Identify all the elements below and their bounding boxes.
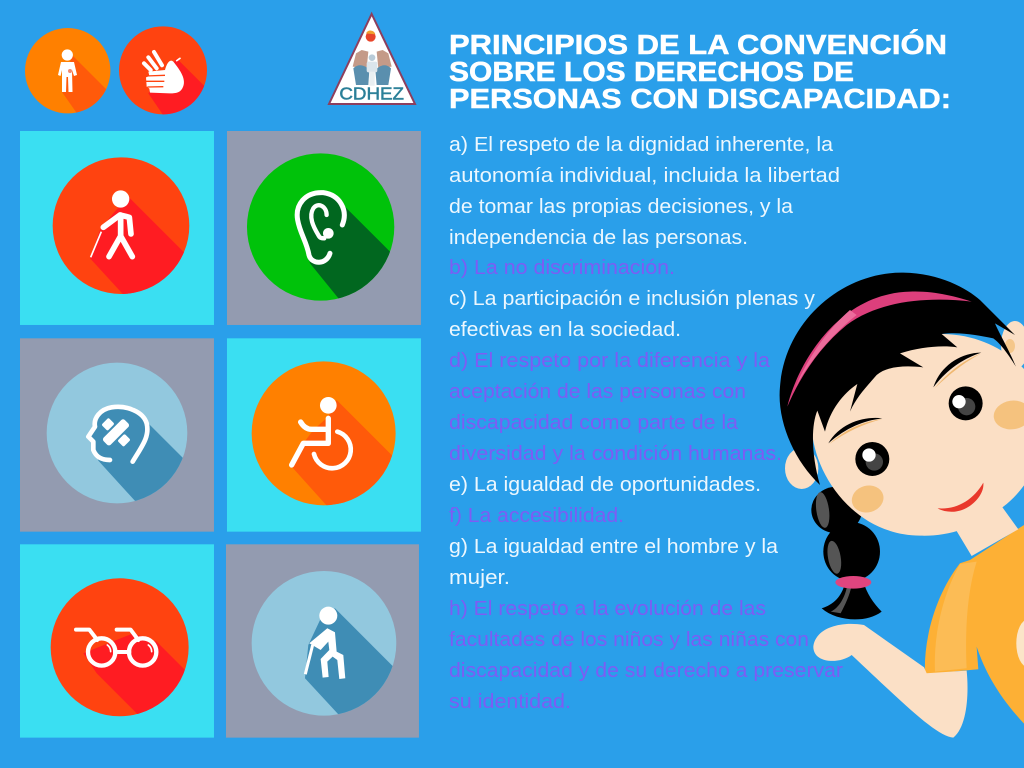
- title: PERSONAS CON DISCAPACIDAD:: [449, 83, 951, 114]
- hair: [780, 273, 1016, 485]
- right cheek: [992, 398, 1024, 432]
- right eye: [949, 386, 983, 420]
- logo emblem: [353, 31, 392, 86]
- text block: principles list: facultades de los niños y las niñas con: [449, 628, 809, 651]
- logo text: CDHEZ: [339, 84, 404, 104]
- right eyebrow: [933, 353, 981, 389]
- text block: principles list: discapacidad como parte de la: [449, 411, 739, 434]
- text block: principles list: discapacidad y de su derecho a preservar: [449, 659, 843, 682]
- text block: principles list: aceptación de las personas con: [449, 380, 746, 403]
- left ear: [785, 448, 818, 489]
- left eye: [855, 442, 889, 476]
- text block: principles list: autonomía individual, incluida la libertad: [449, 164, 840, 187]
- shirt: [925, 525, 1024, 733]
- panel: hearing: [227, 131, 421, 325]
- title: SOBRE LOS DERECHOS DE: [449, 56, 854, 87]
- text block: principles list: su identidad.: [449, 690, 571, 713]
- mouth: [938, 483, 983, 512]
- text block: principles list: h) El respeto a la evolución de las: [449, 597, 766, 620]
- left eyebrow: [828, 418, 882, 444]
- braid: [811, 487, 882, 619]
- title: [449, 29, 951, 114]
- left cheek: [849, 482, 887, 516]
- icon: head with bandage: [88, 407, 147, 462]
- text block: principles list: diversidad y la condición humanas.: [449, 442, 782, 465]
- icon: wheelchair user: [292, 397, 351, 468]
- icon: ear: [297, 193, 344, 262]
- panel: elderly person: [226, 544, 419, 738]
- text block: principles list: de tomar las propias decisiones, y la: [449, 195, 794, 218]
- text block: principles list: b) La no discriminación.: [449, 256, 675, 279]
- face: [812, 334, 1024, 536]
- text block: principles list: g) La igualdad entre el hombre y la: [449, 535, 779, 558]
- icon: glasses: [76, 630, 156, 666]
- headband: [787, 292, 972, 407]
- icon: person with cane: [91, 190, 132, 257]
- text block: principles list: c) La participación e inclusión plenas y: [449, 287, 816, 310]
- panel: wheelchair: [227, 338, 421, 532]
- text block: principles list: e) La igualdad de oportunidades.: [449, 473, 761, 496]
- panel: cognitive disability: [20, 338, 217, 532]
- text block: principles list: efectivas en la sociedad.: [449, 318, 681, 341]
- text block: principles list: d) El respeto por la diferencia y la: [449, 349, 771, 372]
- text block: principles list: independencia de las personas.: [449, 226, 748, 249]
- text block: principles list: a) El respeto de la dignidad inherente, la: [449, 133, 834, 156]
- illustration: girl: [780, 273, 1024, 738]
- right ear: [1001, 321, 1024, 369]
- text block: principles list: [449, 133, 843, 713]
- panel: visual impairment: [20, 544, 214, 738]
- icon: person with walking stick: [305, 607, 345, 679]
- arm and hand: [813, 624, 968, 738]
- panel: blind person: [20, 131, 214, 325]
- text block: principles list: f) La accesibilidad.: [449, 504, 624, 527]
- text block: principles list: mujer.: [449, 566, 510, 589]
- logo: CDHEZ triangle: [329, 14, 415, 104]
- title: PRINCIPIOS DE LA CONVENCIÓN: [449, 29, 947, 60]
- neck: [955, 502, 1018, 556]
- icon: orange circle child with prosthesis: [25, 28, 110, 114]
- icon: red circle sign language hands: [119, 26, 207, 114]
